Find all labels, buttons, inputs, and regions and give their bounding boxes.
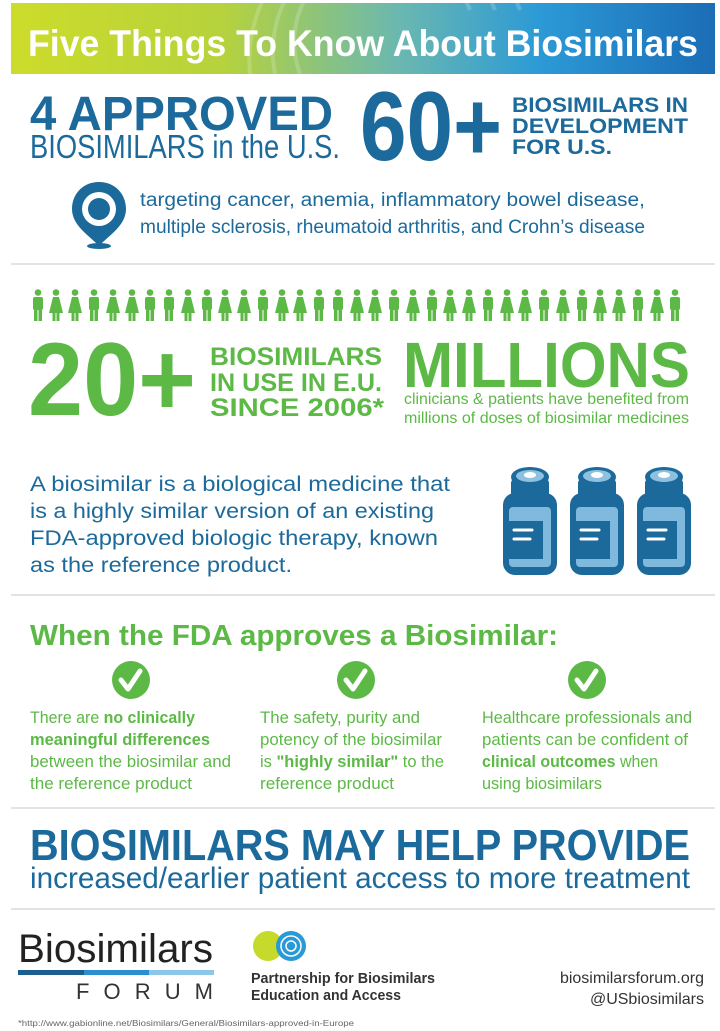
icon: check 2 [337,661,375,699]
logo: Biosimilars Forum: FORUM [76,979,213,1004]
logo: Biosimilars Forum: Biosimilars [18,927,213,971]
logo: Biosimilars Forum [18,927,214,1004]
column 1: meaningful differences [30,730,210,749]
text: targeted diseases: targeting cancer, anemia, inflammatory bowel disease, [140,190,645,211]
contact info [560,970,704,1008]
footnote: *http://www.gabionline.net/Biosimilars/General/Biosimilars-approved-in-Europe [18,1018,354,1028]
column 3 [482,661,692,793]
stat: 60+ in development: DEVELOPMENT [512,115,688,138]
stat: 20+ in EU [28,322,384,438]
column 2: The safety, purity and [260,708,420,727]
text: targeted diseases: multiple sclerosis, rheumatoid arthritis, and Crohn’s disease [140,217,645,238]
contact info: biosimilarsforum.org [560,970,704,987]
stat: 4 approved: 4 APPROVED [30,88,333,141]
icon: location pin [72,182,126,249]
definition text: A biosimilar is a biological medicine that [30,472,450,496]
icon: check 3 [568,661,606,699]
stat: 20+ in EU: BIOSIMILARS [210,343,382,371]
stat: 20+ in EU: SINCE 2006* [210,394,384,422]
contact info: @USbiosimilars [590,991,704,1008]
logo: Partnership: Partnership for Biosimilars [251,970,435,987]
stat: millions: clinicians & patients have benefited from [404,391,689,408]
column 1 [30,661,231,793]
definition text: is a highly similar version of an existing [30,499,434,523]
title bar [11,0,715,74]
callout: access [30,821,691,895]
callout: access: increased/earlier patient access to more treatment [30,862,691,895]
column 3: using biosimilars [482,774,602,793]
column 3: clinical outcomes when [482,752,658,771]
stat: 4 approved: BIOSIMILARS in the U.S. [30,128,340,165]
column 2: is "highly similar" to the [260,752,444,771]
icon: check 1 [112,661,150,699]
logo: Partnership [251,931,435,1004]
column 1: the reference product [30,774,192,793]
title: Five Things To Know About Biosimilars [28,23,698,64]
column 2: potency of the biosimilar [260,730,442,749]
stat: 60+ in development [360,71,688,181]
column 1: between the biosimilar and [30,752,231,771]
column 2: reference product [260,774,394,793]
stat: 4 approved [30,88,340,165]
people row [33,289,680,321]
heading: FDA approval: When the FDA approves a Biosimilar: [30,620,558,652]
stat: 60+ in development: BIOSIMILARS IN [512,94,688,117]
column 2 [260,661,444,793]
column 1: There are no clinically [30,708,196,727]
definition text [30,472,450,577]
logo: Partnership: Education and Access [251,987,401,1004]
stat: 60+ in development: 60+ [360,71,502,181]
definition text: as the reference product. [30,553,292,577]
stat: 20+ in EU: IN USE IN E.U. [210,369,382,397]
column 3: patients can be confident of [482,730,688,749]
stat: 20+ in EU: 20+ [28,322,196,438]
text: targeted diseases [140,190,645,238]
stat: millions: MILLIONS [403,329,690,401]
icon: vials [503,467,691,575]
stat: 60+ in development: FOR U.S. [512,136,612,159]
definition text: FDA-approved biologic therapy, known [30,526,438,550]
column 3: Healthcare professionals and [482,708,692,727]
stat: millions: millions of doses of biosimilar medicines [404,410,689,427]
